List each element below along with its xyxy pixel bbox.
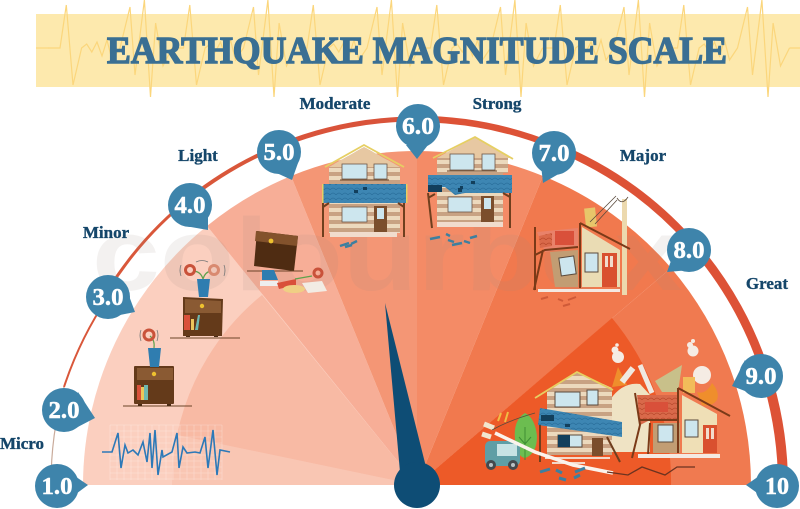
title banner [36, 0, 800, 97]
beige debris [610, 384, 650, 452]
blue debris [540, 468, 585, 480]
bubble 9.0: 9.0 [746, 364, 776, 390]
label: Major: Major [620, 146, 667, 165]
bubble 4.0: 4.0 [174, 193, 206, 219]
bubble 2.0 [42, 388, 95, 432]
bubble 1.0 [35, 464, 88, 508]
bubble 9.0 [732, 354, 783, 398]
label: Minor: Minor [83, 223, 130, 242]
smoke and fire [612, 339, 718, 405]
icon: house with damaged roof band, magnitude 5 [322, 145, 408, 247]
broken pole and sparks [482, 424, 494, 437]
bubble 6.0 [396, 104, 440, 159]
title: EARTHQUAKE MAGNITUDE SCALE [107, 30, 727, 72]
needle gauge [385, 303, 440, 508]
bubble 5.0 [257, 130, 301, 180]
label: Micro: Micro [0, 434, 44, 453]
icon: nightstand with flower, magnitude 2 [123, 330, 192, 406]
bubble 2.0: 2.0 [48, 398, 80, 424]
seismograph chart [102, 425, 230, 480]
bubble 3.0 [86, 275, 135, 319]
bubble 10 [746, 464, 799, 508]
ground crack [495, 433, 613, 473]
tree [515, 413, 537, 458]
bubble 10: 10 [765, 474, 789, 500]
bubble 4.0 [168, 183, 212, 230]
outer magnitude arc [51, 119, 783, 485]
icon: house with broken roof band, magnitude 6 [428, 137, 513, 245]
bubble 7.0 [532, 131, 576, 183]
icon: toppled nightstand and scattered items, magnitude 4 [247, 231, 327, 293]
left house [547, 372, 612, 455]
label: Moderate: Moderate [300, 94, 371, 113]
icon: nightstand with flowers, magnitude 3 [170, 260, 240, 338]
bubble 5.0: 5.0 [264, 140, 294, 166]
bubble 8.0: 8.0 [674, 238, 704, 264]
label: Light: Light [178, 146, 218, 165]
label: Great: Great [746, 274, 788, 293]
car [485, 441, 520, 466]
bubble 3.0: 3.0 [92, 285, 124, 311]
right house [682, 395, 717, 453]
bubble 7.0: 7.0 [538, 141, 570, 167]
label: Strong: Strong [473, 94, 522, 113]
bubble 6.0: 6.0 [402, 114, 434, 140]
icon: partly collapsed house and pole, magnitude 7 [534, 196, 630, 306]
bubble 1.0: 1.0 [42, 474, 72, 500]
bubble 8.0 [667, 228, 711, 272]
watermark: colourbox [92, 197, 682, 312]
semicircle intensity fan [83, 151, 751, 485]
icon: destroyed houses, fire and cracked ground, magnitude 9 [482, 339, 730, 480]
